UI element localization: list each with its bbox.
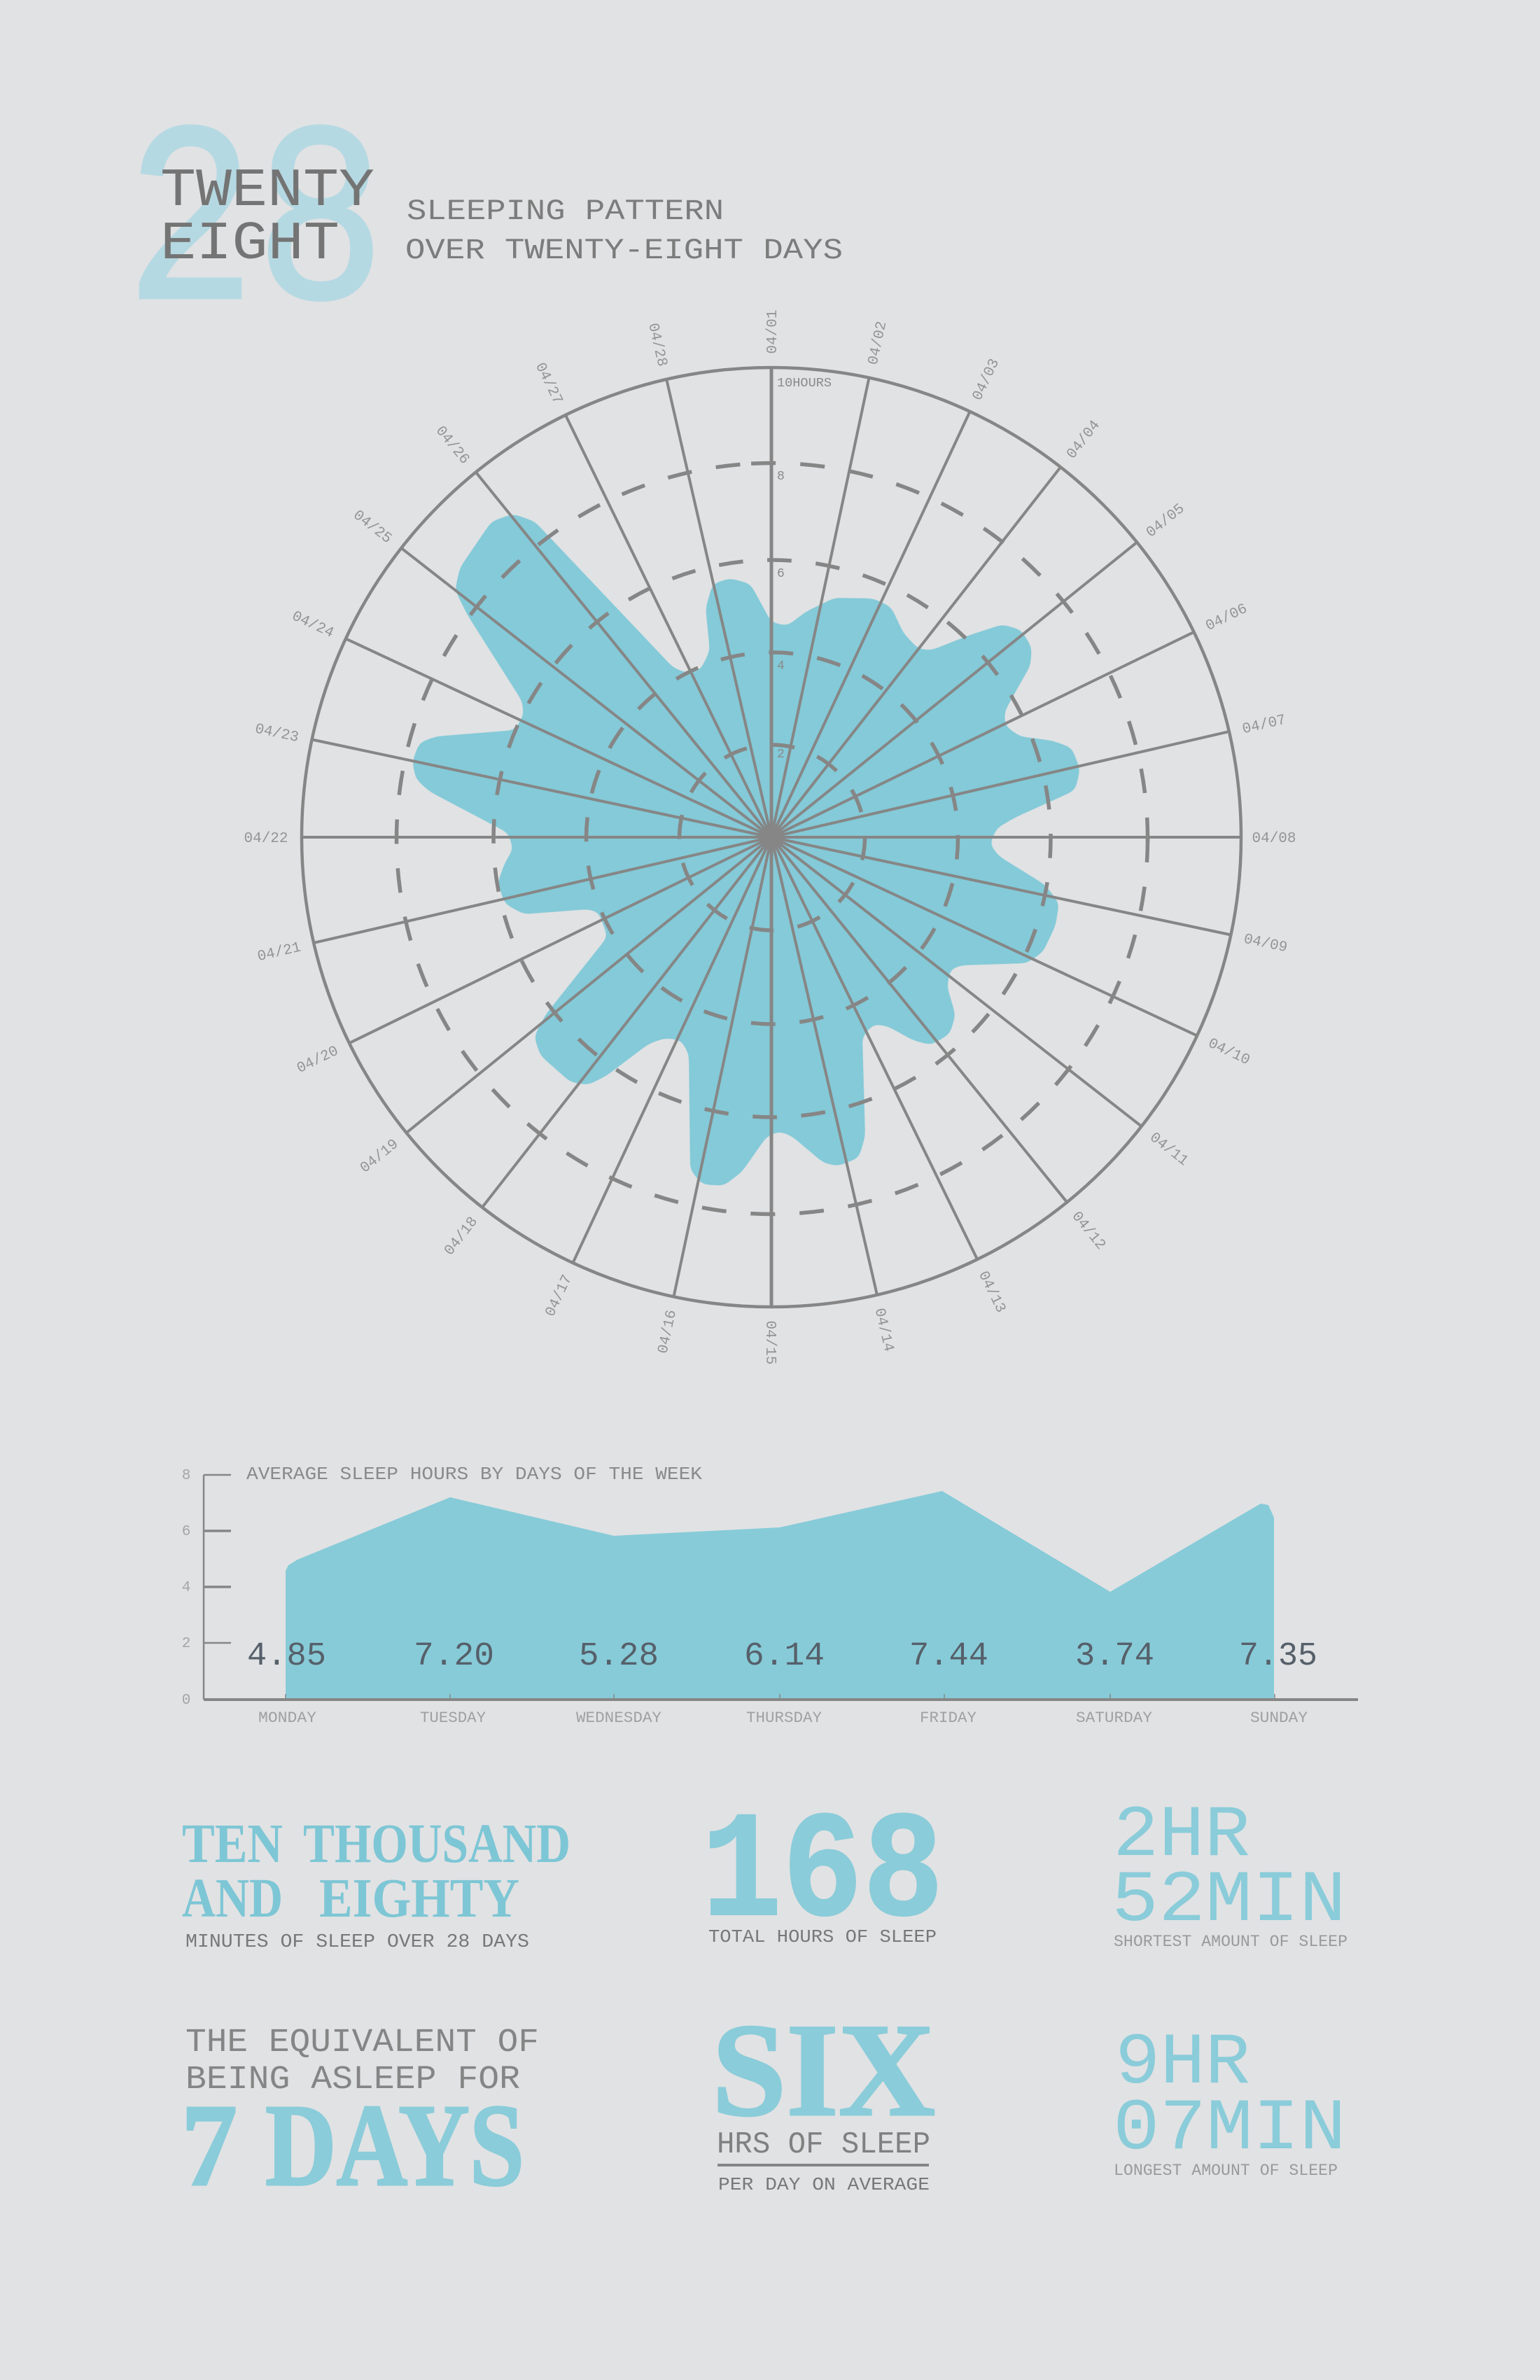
date labels: 04/03 xyxy=(970,356,1003,403)
date labels: 04/24 xyxy=(289,608,336,642)
ring labels: 10HOURS xyxy=(777,377,832,391)
stat: equivalent of 7 days: DAYS xyxy=(265,2080,524,2211)
stat: ten thousand and eighty minutes: TEN xyxy=(182,1814,283,1875)
day labels: MONDAY xyxy=(258,1709,316,1727)
y axis labels: 6 xyxy=(182,1524,190,1540)
date labels: 04/19 xyxy=(358,1137,402,1177)
stat: six hours of sleep per day: PER DAY ON AVERAGE xyxy=(718,2174,930,2195)
day labels: SATURDAY xyxy=(1076,1709,1152,1727)
big number 28: 28 xyxy=(125,84,386,374)
dashed hour rings xyxy=(397,463,1148,1214)
day labels: THURSDAY xyxy=(746,1709,822,1727)
date labels: 04/16 xyxy=(656,1309,680,1355)
stat: shortest sleep xyxy=(1112,1795,1348,1951)
ring labels: 8 xyxy=(777,470,785,484)
ring labels: 6 xyxy=(777,567,785,581)
date labels: 04/23 xyxy=(253,722,300,746)
date labels: 04/07 xyxy=(1241,713,1287,738)
radial chart: 28 days of sleep xyxy=(244,309,1296,1365)
date labels: 04/05 xyxy=(1144,501,1188,541)
outer ring xyxy=(302,368,1241,1307)
date labels: 04/26 xyxy=(432,424,472,468)
centre hub xyxy=(760,825,783,849)
stat: ten thousand and eighty minutes xyxy=(182,1814,570,1953)
sleep hours blob xyxy=(412,514,1080,1186)
date labels: 04/14 xyxy=(871,1307,896,1353)
date labels: 04/08 xyxy=(1252,831,1296,847)
axes and ticks xyxy=(204,1475,1358,1700)
stat: ten thousand and eighty minutes: MINUTES OF SLEEP OVER 28 DAYS xyxy=(186,1932,529,1953)
stat: equivalent of 7 days: 7 xyxy=(181,2080,237,2211)
subtitle xyxy=(405,195,843,267)
y axis labels: 2 xyxy=(182,1636,190,1652)
value labels: 7.44 xyxy=(909,1638,988,1675)
day labels: FRIDAY xyxy=(920,1709,976,1727)
title: twenty eight: EIGHT xyxy=(160,214,340,275)
date labels: 04/27 xyxy=(531,360,565,407)
date labels: 04/25 xyxy=(350,507,394,547)
stat: shortest sleep: 52MIN xyxy=(1112,1860,1346,1942)
value labels: 5.28 xyxy=(579,1638,659,1675)
stat: ten thousand and eighty minutes: AND xyxy=(182,1868,283,1929)
stat: shortest sleep: SHORTEST AMOUNT OF SLEEP xyxy=(1114,1933,1348,1951)
date labels: 04/20 xyxy=(295,1044,342,1077)
area chart: average sleep hours by day of week xyxy=(182,1464,1358,1727)
date labels: 04/11 xyxy=(1146,1130,1191,1170)
stat: ten thousand and eighty minutes: EIGHTY xyxy=(319,1868,519,1929)
stat: longest sleep: 9HR xyxy=(1115,2022,1250,2105)
y axis labels xyxy=(182,1468,190,1709)
day labels xyxy=(258,1709,1308,1727)
date labels: 04/13 xyxy=(974,1269,1008,1315)
date labels: 04/21 xyxy=(256,940,302,965)
ring labels xyxy=(777,377,832,762)
value labels: 4.85 xyxy=(247,1638,326,1675)
date labels: 04/10 xyxy=(1205,1036,1252,1069)
value labels: 6.14 xyxy=(744,1638,825,1675)
value labels xyxy=(247,1638,1317,1675)
date labels: 04/04 xyxy=(1064,418,1104,463)
stat: 168 total hours: 168 xyxy=(701,1788,944,1960)
chart title: AVERAGE SLEEP HOURS BY DAYS OF THE WEEK xyxy=(246,1464,702,1485)
value labels: 7.20 xyxy=(414,1638,494,1675)
title: twenty eight xyxy=(160,161,374,275)
subtitle: SLEEPING PATTERN xyxy=(407,195,724,228)
stat: longest sleep: LONGEST AMOUNT OF SLEEP xyxy=(1114,2162,1338,2180)
date labels: 04/09 xyxy=(1242,932,1289,956)
value labels: 3.74 xyxy=(1075,1638,1154,1675)
day labels: SUNDAY xyxy=(1250,1709,1308,1727)
date labels: 04/18 xyxy=(442,1214,482,1259)
ring labels: 4 xyxy=(777,659,785,673)
stat: longest sleep: 07MIN xyxy=(1113,2088,1346,2171)
day labels: WEDNESDAY xyxy=(576,1709,662,1727)
area xyxy=(286,1491,1274,1700)
subtitle: OVER TWENTY-EIGHT DAYS xyxy=(405,234,843,267)
stat: equivalent of 7 days xyxy=(181,2024,539,2211)
date labels: 04/01 xyxy=(765,309,781,354)
date labels xyxy=(244,309,1296,1365)
date labels: 04/22 xyxy=(244,831,288,847)
stat: ten thousand and eighty minutes: THOUSAND xyxy=(303,1814,570,1875)
title block xyxy=(125,84,843,374)
date labels: 04/28 xyxy=(644,322,670,368)
spokes xyxy=(302,368,1241,1307)
y axis labels: 0 xyxy=(182,1693,190,1709)
stat: longest sleep xyxy=(1113,2022,1346,2180)
stat: six hours of sleep per day: HRS OF SLEEP xyxy=(717,2127,930,2162)
date labels: 04/02 xyxy=(866,320,890,367)
date labels: 04/15 xyxy=(762,1320,778,1365)
day labels: TUESDAY xyxy=(420,1709,486,1727)
title: twenty eight: TWENTY xyxy=(160,161,374,222)
stat: equivalent of 7 days: THE EQUIVALENT OF xyxy=(186,2024,539,2062)
y axis labels: 8 xyxy=(182,1468,190,1484)
date labels: 04/12 xyxy=(1068,1209,1108,1253)
stat: equivalent of 7 days: BEING ASLEEP FOR xyxy=(186,2062,520,2099)
date labels: 04/17 xyxy=(542,1273,576,1320)
y axis labels: 4 xyxy=(182,1580,190,1596)
ring labels: 2 xyxy=(777,748,785,762)
stat: 168 total hours: TOTAL HOURS OF SLEEP xyxy=(708,1926,937,1947)
stat: shortest sleep: 2HR xyxy=(1113,1795,1250,1877)
stat: six hours of sleep per day: SIX xyxy=(712,1997,935,2144)
date labels: 04/06 xyxy=(1203,601,1250,635)
value labels: 7.35 xyxy=(1239,1638,1317,1675)
